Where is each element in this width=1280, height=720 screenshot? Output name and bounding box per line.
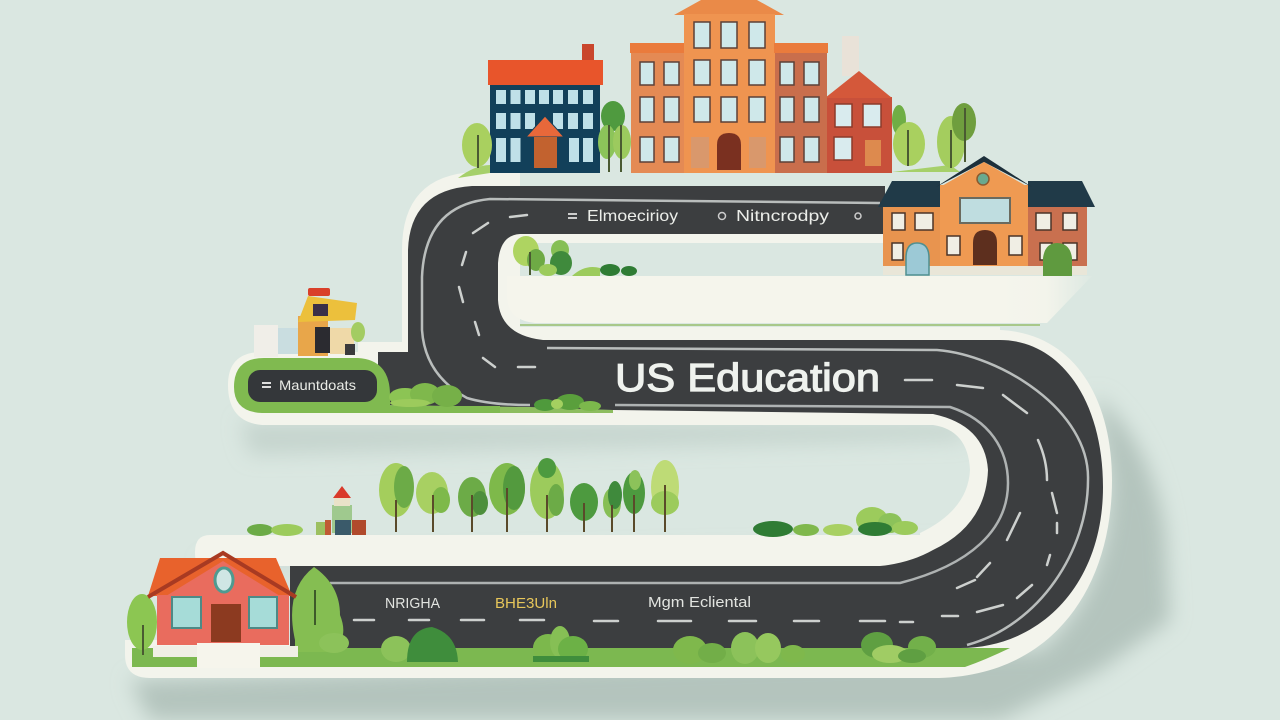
small yellow school [254,288,365,357]
road labels top: Elmoecirioy [587,208,678,225]
top right trees [892,103,976,172]
platform: middle grass [385,405,613,413]
middle row trees [379,458,679,532]
label: Mauntdoats [248,370,377,402]
red house [127,553,349,668]
asphalt road [290,186,1103,648]
top left trees [458,101,631,178]
label: Mauntdoats: Mauntdoats [279,377,356,393]
terrace trees [513,236,637,276]
blue building [488,44,603,173]
title: US Education [615,357,880,400]
road labels bottom: NRIGHA [385,595,440,612]
middle row bushes [247,507,918,537]
road labels bottom [385,594,751,612]
road lane lines [330,199,1088,645]
green pill [234,358,500,413]
terrace green trim [520,324,1040,326]
large orange school [630,0,828,173]
road shadows [130,395,1170,720]
platform: bottom grass [132,648,1010,667]
small red school with chimney [825,36,892,173]
playground tower [316,486,366,535]
road labels bottom: Mgm Ecliental [648,594,751,611]
pill bushes [389,383,601,411]
white road border [125,172,1112,678]
bottom row bushes [381,626,936,664]
road centre dashes [354,215,1057,622]
road labels top [568,208,861,225]
road labels bottom: BHE3Uln [495,595,557,612]
right school [878,156,1095,276]
panel: white upper terrace [507,276,1092,323]
road labels top: Nitncrodpy [736,208,829,225]
